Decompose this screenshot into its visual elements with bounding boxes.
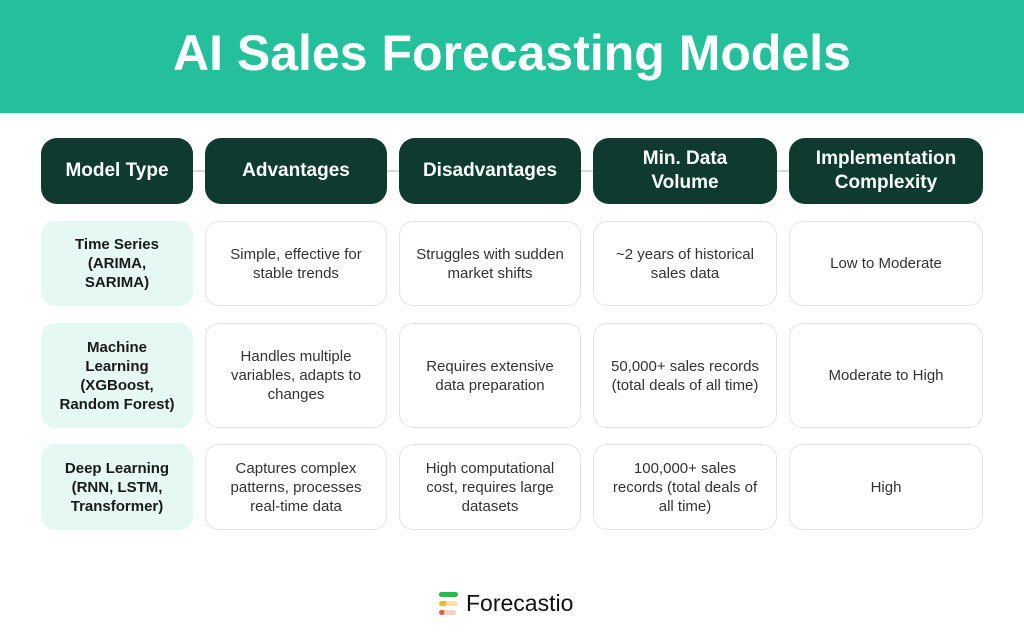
header: Min. Data Volume — [593, 138, 777, 204]
row 3 data volume: records (total deals of — [613, 478, 757, 496]
header: Implementation Complexity: Implementation — [816, 148, 956, 169]
header: Min. Data Volume: Min. Data — [643, 148, 727, 169]
row 1: Time Series: (ARIMA, — [88, 255, 146, 272]
row 1 data volume: sales data — [651, 264, 719, 282]
row 3: Deep Learning: Deep Learning — [65, 460, 169, 476]
row 3: Deep Learning: (RNN, LSTM, — [72, 478, 162, 496]
row 2 advantages: changes — [268, 386, 324, 403]
row 2 data volume: (total deals of all time) — [612, 376, 758, 394]
row 3 advantages — [205, 444, 387, 530]
logo text: Forecastio — [466, 590, 573, 616]
row 2 complexity — [789, 323, 983, 428]
row 1 disadvantages: Struggles with sudden — [416, 246, 564, 262]
header: Disadvantages — [399, 138, 581, 204]
row 3 complexity: High — [871, 478, 901, 496]
header: Model Type — [41, 138, 193, 204]
row 3 advantages: real-time data — [250, 498, 342, 514]
row 3 disadvantages: cost, requires large — [426, 478, 554, 496]
row 3: Deep Learning — [41, 444, 193, 530]
row 3: Deep Learning: Transformer) — [71, 498, 163, 514]
row 2 disadvantages — [399, 323, 581, 428]
row 2: Machine Learning — [41, 323, 193, 428]
row 3 complexity — [789, 444, 983, 530]
row 1 data volume: ~2 years of historical — [616, 246, 754, 262]
row 2 disadvantages: Requires extensive — [426, 358, 554, 374]
row 1 disadvantages: market shifts — [447, 264, 533, 282]
row 2 data volume: 50,000+ sales records — [611, 358, 759, 374]
row 1: Time Series: Time Series — [75, 236, 159, 253]
row 2: Machine Learning: Random Forest) — [59, 396, 174, 412]
header: Min. Data Volume: Volume — [651, 172, 719, 193]
row 1: Time Series — [41, 221, 193, 306]
row 2: Machine Learning: Machine — [87, 338, 147, 356]
row 2: Machine Learning: (XGBoost, — [80, 376, 154, 394]
row 3 advantages: patterns, processes — [231, 478, 361, 496]
row 2 complexity: Moderate to High — [828, 367, 944, 384]
row 2 advantages: variables, adapts to — [231, 367, 361, 384]
header band — [0, 0, 1024, 113]
row 1 disadvantages — [399, 221, 581, 306]
row 1 advantages — [205, 221, 387, 306]
row 3 data volume: all time) — [659, 498, 711, 514]
icon: logo bars — [439, 592, 458, 615]
row 3 disadvantages: datasets — [462, 498, 518, 514]
row 1 advantages: Simple, effective for — [230, 246, 362, 262]
row 1 advantages: stable trends — [253, 264, 339, 282]
row 2 advantages — [205, 323, 387, 428]
row 2 disadvantages: data preparation — [435, 376, 545, 394]
row 3 disadvantages: High computational — [426, 460, 554, 476]
row 3 data volume — [593, 444, 777, 530]
row 1 complexity: Low to Moderate — [830, 255, 942, 272]
header: Implementation Complexity: Complexity — [835, 172, 937, 193]
row 1: Time Series: SARIMA) — [85, 274, 149, 291]
header: Model Type: Model Type — [65, 160, 169, 181]
row 3 advantages: Captures complex — [236, 460, 356, 476]
header: Disadvantages: Disadvantages — [423, 160, 557, 181]
header: Implementation Complexity — [789, 138, 983, 204]
row 2: Machine Learning: Learning — [85, 358, 149, 374]
row 2 advantages: Handles multiple — [241, 348, 351, 365]
row 1 complexity — [789, 221, 983, 306]
header: Advantages — [205, 138, 387, 204]
logo: Forecastio — [439, 590, 573, 616]
row 1 data volume — [593, 221, 777, 306]
row 2 data volume — [593, 323, 777, 428]
header: Advantages: Advantages — [242, 160, 350, 181]
row 3 data volume: 100,000+ sales — [634, 460, 736, 476]
title: AI Sales Forecasting Models — [173, 25, 851, 81]
row 3 disadvantages — [399, 444, 581, 530]
